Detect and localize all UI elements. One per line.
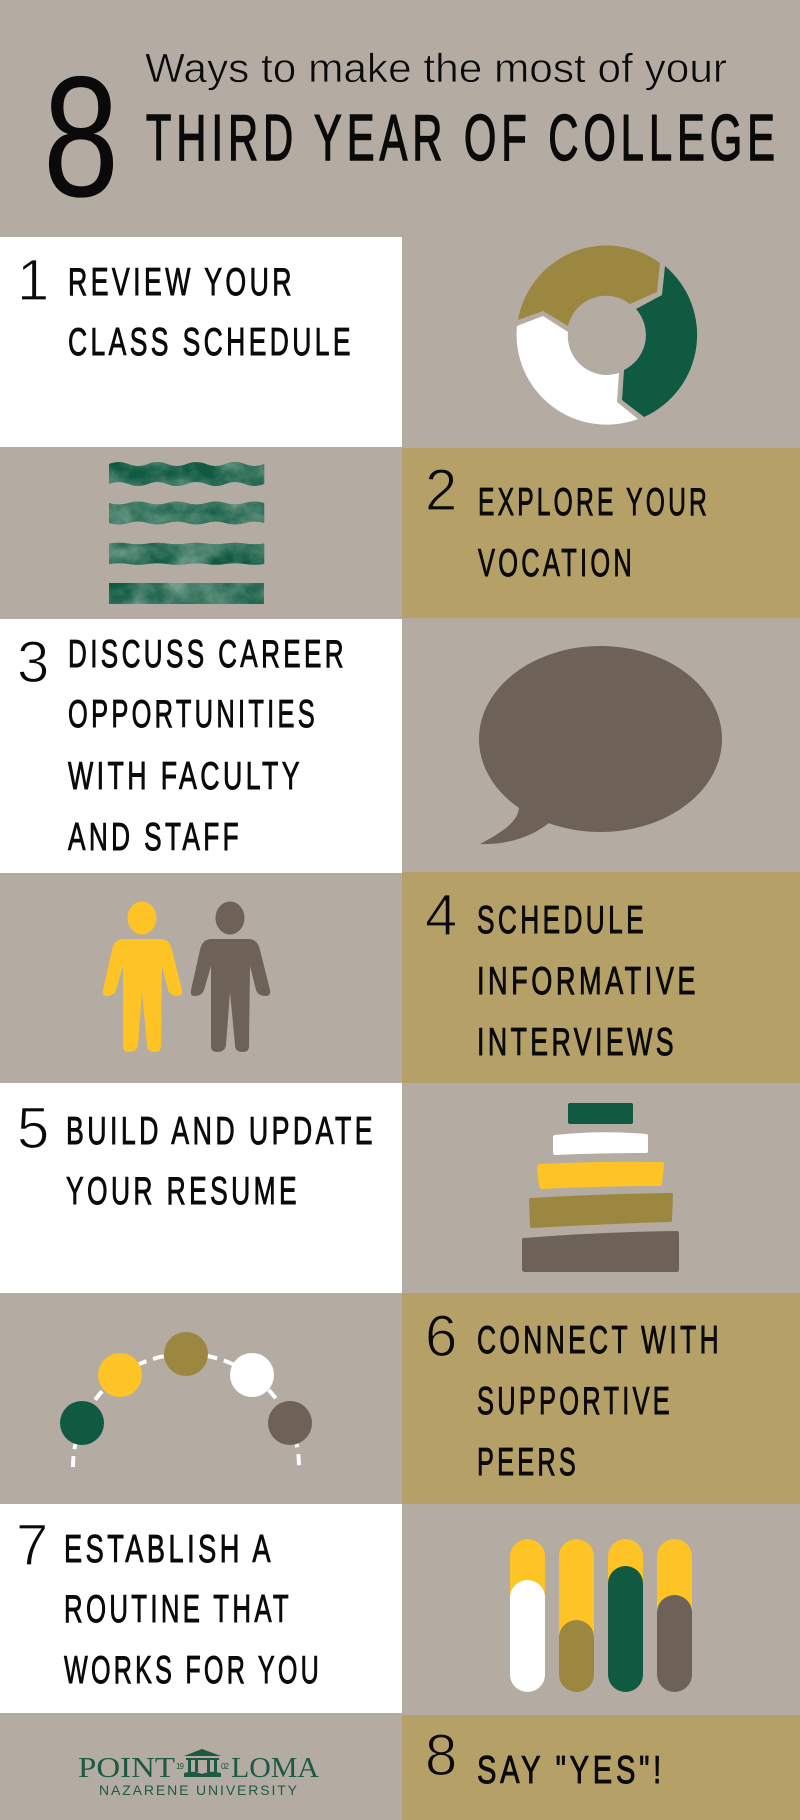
- number 4: 4: [425, 883, 457, 948]
- icon: cycle donut: [517, 245, 697, 425]
- step 2 text: [478, 481, 710, 585]
- step 4 text: INTERVIEWS: [477, 1021, 677, 1064]
- step 5 text: YOUR RESUME: [66, 1170, 300, 1213]
- step 3 text: WITH FACULTY: [68, 755, 303, 798]
- logo: Point Loma Nazarene University: LOMA: [231, 1752, 319, 1784]
- step 4 text: [477, 899, 699, 1064]
- step 3 text: OPPORTUNITIES: [68, 693, 318, 736]
- panel: step 5: [0, 1083, 402, 1293]
- panel: step 8: [402, 1715, 800, 1820]
- number 1: 1: [17, 248, 49, 313]
- panel: step 7: [0, 1504, 402, 1713]
- step 6 text: [477, 1319, 722, 1484]
- step 1 text: CLASS SCHEDULE: [68, 321, 354, 364]
- step 7 text: ROUTINE THAT: [64, 1588, 292, 1631]
- number 5: 5: [17, 1096, 49, 1161]
- logo: Point Loma Nazarene University: NAZARENE UNIVERSITY: [99, 1782, 298, 1798]
- step 7 text: ESTABLISH A: [64, 1528, 274, 1571]
- step 3 text: DISCUSS CAREER: [68, 633, 347, 676]
- step 4 text: INFORMATIVE: [477, 960, 699, 1003]
- step 7 text: [64, 1528, 322, 1692]
- panel: step 2: [402, 448, 800, 618]
- number 2: 2: [425, 458, 457, 523]
- icon: arc of connected dots: [60, 1332, 312, 1467]
- header: [43, 41, 780, 233]
- step 1 text: [68, 261, 354, 364]
- step 5 text: BUILD AND UPDATE: [66, 1110, 376, 1153]
- number 6: 6: [425, 1304, 457, 1369]
- panel: step 1: [0, 237, 402, 447]
- step 4 text: SCHEDULE: [477, 899, 647, 942]
- person: brown: [191, 902, 270, 1052]
- big number 8: 8: [43, 41, 119, 233]
- icon: speech bubble: [479, 646, 722, 844]
- icon: wavy green stripes: [109, 462, 264, 604]
- logo: Point Loma Nazarene University: 02: [221, 1762, 230, 1771]
- step 6 text: SUPPORTIVE: [477, 1380, 673, 1423]
- subtitle: Ways to make the most of your: [145, 45, 727, 91]
- step 2 text: VOCATION: [478, 542, 635, 585]
- step 7 text: WORKS FOR YOU: [64, 1649, 322, 1692]
- step 3 text: AND STAFF: [68, 816, 242, 859]
- panel: step 6: [402, 1293, 800, 1504]
- icon: building: [184, 1749, 221, 1777]
- number 8: 8: [425, 1723, 457, 1788]
- step 5 text: [66, 1110, 376, 1213]
- step 8 text: SAY "YES"!: [477, 1749, 665, 1792]
- step 1 text: REVIEW YOUR: [68, 261, 295, 304]
- logo: Point Loma Nazarene University: 19: [176, 1762, 185, 1771]
- icon: two people: [103, 902, 270, 1052]
- icon: pill bars: [510, 1539, 692, 1692]
- person: yellow: [103, 902, 182, 1052]
- panel: step 4: [402, 872, 800, 1083]
- step 6 text: PEERS: [477, 1441, 579, 1484]
- number 7: 7: [16, 1513, 48, 1578]
- logo: Point Loma Nazarene University: POINT: [78, 1752, 175, 1784]
- number 3: 3: [17, 630, 49, 695]
- icon: stacked books: [522, 1103, 679, 1272]
- panel: step 3: [0, 619, 402, 873]
- logo: Point Loma Nazarene University: [78, 1749, 319, 1798]
- step 3 text: [68, 633, 347, 859]
